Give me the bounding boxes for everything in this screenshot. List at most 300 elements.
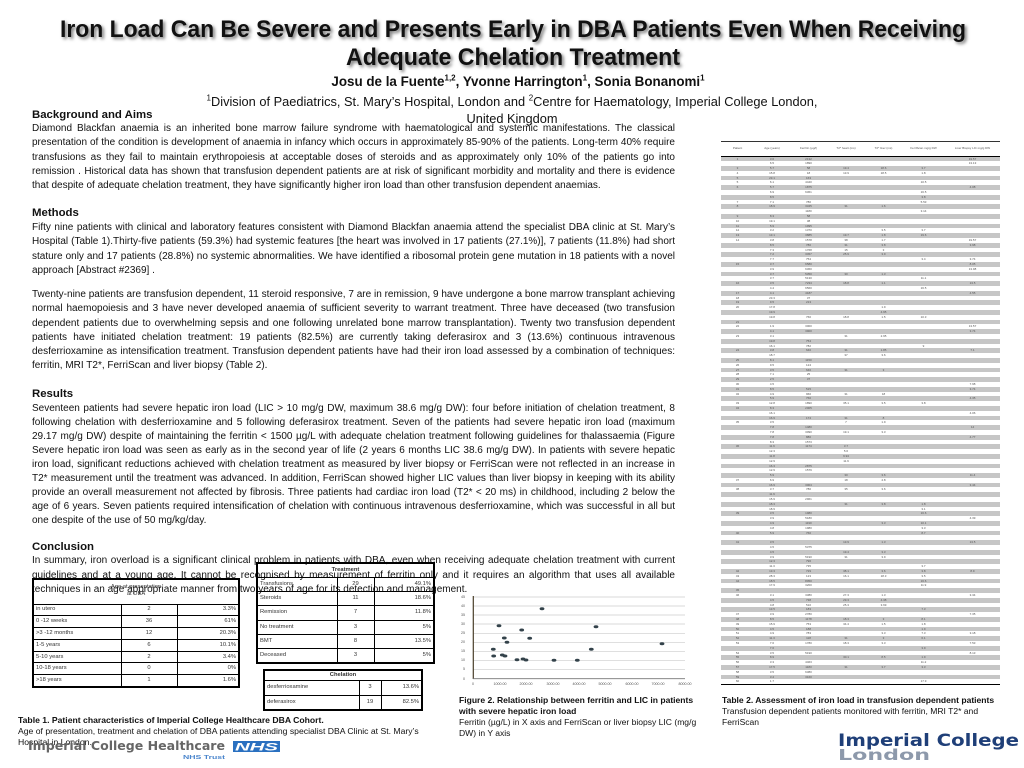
table: assessment of iron load: 7.53 xyxy=(970,641,975,645)
table: treatment: 8 xyxy=(354,638,357,644)
table: assessment of iron load: 640 xyxy=(806,368,811,372)
table: assessment of iron load: 3.98 xyxy=(970,243,975,247)
table: assessment of iron load: 3.8 xyxy=(770,238,774,242)
table: age at presentation: 12 xyxy=(146,630,152,636)
logo: Imperial College London xyxy=(838,731,1019,764)
data points xyxy=(491,607,664,662)
table: chelation: 13.6% xyxy=(403,684,419,690)
table: assessment of iron load: 3.7 xyxy=(770,272,774,276)
table: assessment of iron load: 5.7 xyxy=(770,166,774,170)
table: assessment of iron load: 4 xyxy=(737,171,738,175)
table: age at presentation: 1.6% xyxy=(223,677,236,683)
table: assessment of iron load: 11.1 xyxy=(921,276,926,280)
text: methods paragraph 2: desferrioxamine as intensification treatment. Transfusion dependent patients have had their iron load assessed by a combination of techniques: xyxy=(32,346,675,357)
table: assessment of iron load: 3 xyxy=(883,636,884,640)
table: assessment of iron load: 3.8 xyxy=(881,502,886,506)
table: assessment of iron load: 5.53 xyxy=(921,200,926,204)
table: assessment of iron load: 43 xyxy=(736,574,739,578)
table: assessment of iron load: 51 xyxy=(736,631,739,635)
table: assessment of iron load: 8050 xyxy=(805,579,812,583)
text: methods paragraph 1: approach [Abstract #2369] . xyxy=(32,265,155,276)
table: assessment of iron load: 14 xyxy=(736,238,739,242)
table: assessment of iron load: 3.9 xyxy=(881,252,886,256)
table: assessment of iron load: 753 xyxy=(806,622,811,626)
text: methods paragraph 2: normal haemopoiesis and 3 have never developed anaemia of sufficient severity to warrant treatment. Three have deceased (two transfusion xyxy=(32,303,675,314)
table: assessment of iron load: 3.7 xyxy=(770,262,774,266)
table: assessment of iron load: 3.3 xyxy=(921,526,926,530)
table: assessment of iron load: 1980 xyxy=(805,511,812,515)
table: assessment of iron load: 35.1 xyxy=(843,401,849,405)
table: assessment of iron load: T2* liver (ms) xyxy=(875,146,892,150)
table: assessment of iron load: 1.3 xyxy=(881,593,886,597)
table: assessment of iron load: 13.13 xyxy=(969,161,976,165)
table: assessment of iron load: 11.3 xyxy=(769,564,775,568)
y axis labels: 5 xyxy=(463,667,465,671)
table: assessment of iron load: 19.4 xyxy=(843,166,849,170)
table: treatment: 3 xyxy=(354,652,357,658)
table: assessment of iron load: 3885 xyxy=(805,233,812,237)
table: assessment of iron load: 3.34 xyxy=(970,593,975,597)
table: assessment of iron load: T2* heart (ms) xyxy=(836,146,856,150)
table: assessment of iron load: 1.9 xyxy=(881,420,886,424)
table: assessment of iron load: 19.1 xyxy=(769,219,775,223)
table: assessment of iron load: 23.3 xyxy=(769,296,775,300)
table: assessment of iron load: 39 xyxy=(736,511,739,515)
caption: table 2: FerriScan xyxy=(722,717,759,727)
table: assessment of iron load: 3.3 xyxy=(881,641,886,645)
table: assessment of iron load: 7.8 xyxy=(770,430,774,434)
table: assessment of iron load: 17.8 xyxy=(769,305,775,309)
table: assessment of iron load: 11.8 xyxy=(769,454,775,458)
table: assessment of iron load: 16.5 xyxy=(921,286,926,290)
table: assessment of iron load: 2.95 xyxy=(881,334,886,338)
table: assessment of iron load: 8.3 xyxy=(770,406,774,410)
table: assessment of iron load: 4.38 xyxy=(881,598,886,602)
table: assessment of iron load: 5.9 xyxy=(770,224,774,228)
table: assessment of iron load: 7.2 xyxy=(770,252,774,256)
table: assessment of iron load: 8.1 xyxy=(770,358,774,362)
table: age at presentation: 1-5 years xyxy=(36,642,60,648)
table: assessment of iron load: 3.18 xyxy=(970,631,975,635)
table: assessment of iron load: 3.8 xyxy=(770,348,774,352)
table: assessment of iron load: 31 xyxy=(844,555,848,559)
table: age at presentation: 10-18 years xyxy=(36,665,67,671)
logo: Imperial College Healthcare NHS Trust xyxy=(28,739,280,761)
table: assessment of iron load: 3 xyxy=(737,166,738,170)
table: assessment of iron load: 12.9 xyxy=(769,468,775,472)
table: assessment of iron load: 3.74 xyxy=(970,257,975,261)
caption: table 2 xyxy=(722,695,994,727)
table: assessment of iron load: 4.5 xyxy=(770,382,774,386)
table: treatment: 11.8% xyxy=(415,609,431,615)
table: assessment of iron load: 782 xyxy=(806,344,811,348)
table: assessment of iron load: 1.8 xyxy=(921,171,926,175)
table: age at presentation: Age at presentation xyxy=(111,584,161,590)
table: assessment of iron load: 640 xyxy=(806,348,811,352)
table: assessment of iron load: 1890 xyxy=(805,161,812,165)
table: assessment of iron load: 7.1 xyxy=(770,200,774,204)
x axis labels: 4000.00 xyxy=(572,682,586,686)
table: assessment of iron load: 4.39 xyxy=(970,516,975,520)
y axis labels: 45 xyxy=(461,595,465,599)
table: assessment of iron load: 27 xyxy=(736,368,739,372)
table: assessment of iron load: 3.8 xyxy=(921,401,926,405)
table: treatment: 13.5% xyxy=(415,638,431,644)
table: assessment of iron load: 780 xyxy=(806,487,811,491)
table: assessment of iron load: 3 xyxy=(883,248,884,252)
table: assessment of iron load: 13.98 xyxy=(969,267,976,271)
table: assessment of iron load: 25.3 xyxy=(843,603,849,607)
table: assessment of iron load: 22 xyxy=(736,324,739,328)
table: assessment of iron load: 21 xyxy=(736,320,739,324)
table: assessment of iron load: 13.57 xyxy=(969,324,976,328)
text: results: provide an overall measurement not affected by fibrosis. Three patients had cardiac iron load (T2* < 20 ms) in childhood, including 2 below the xyxy=(32,486,675,498)
table: assessment of iron load: 20 xyxy=(736,305,739,309)
table: assessment of iron load: 13.9 xyxy=(843,171,849,175)
logo: Imperial College Healthcare NHS Trust: NHS xyxy=(235,742,279,754)
table: assessment of iron load: 18.9 xyxy=(769,507,775,511)
table: assessment of iron load: 11.3 xyxy=(769,636,775,640)
table: assessment of iron load: 36 xyxy=(736,444,739,448)
y axis labels: 20 xyxy=(461,640,465,644)
table: assessment of iron load: 29 xyxy=(736,377,739,381)
table: assessment of iron load: 7.3 xyxy=(770,248,774,252)
table: assessment of iron load: 38 xyxy=(736,487,739,491)
table: assessment of iron load: 5.9 xyxy=(770,531,774,535)
table: assessment of iron load: 30.1 xyxy=(843,655,849,659)
logo: Imperial College London: Imperial College xyxy=(838,731,1019,751)
table: assessment of iron load: 27.3 xyxy=(843,593,849,597)
x axis labels: 3000.00 xyxy=(546,682,560,686)
x axis labels: 1000.00 xyxy=(494,682,506,686)
table: assessment of iron load: 3900 xyxy=(805,329,812,333)
table: assessment of iron load: FerriScan mg/g DW xyxy=(910,146,937,150)
y axis labels: 40 xyxy=(461,604,465,608)
table: assessment of iron load: 46 xyxy=(736,593,739,597)
table: assessment of iron load: 1.7 xyxy=(881,238,886,242)
table: assessment of iron load: 124 xyxy=(806,363,811,367)
table: assessment of iron load: 30 xyxy=(844,272,848,276)
table: assessment of iron load: 37 xyxy=(807,296,810,300)
text: background: remission . Historical data has shown that transfusion dependent patients are at risk of significant morbidity and mortality and there is evidence xyxy=(32,166,675,177)
table: age at presentation: 3.3% xyxy=(223,606,236,612)
table: assessment of iron load: 7 xyxy=(845,420,847,424)
table: treatment: 7 xyxy=(354,609,357,615)
table: assessment of iron load: 3.74 xyxy=(970,329,975,333)
table: assessment of iron load: 6.9 xyxy=(770,478,774,482)
table: assessment of iron load: 738 xyxy=(806,598,811,602)
text: methods paragraph 1: stature only and 17 patients (28.8%) no systemic abnormalities. We have identified a ribosomal protein gene mutation in 18 patients with a novel xyxy=(32,250,675,262)
table: assessment of iron load: 3.7 xyxy=(844,444,848,448)
table: age at presentation: 0 -12 weeks xyxy=(36,618,67,624)
table: assessment of iron load: 12.8 xyxy=(769,401,775,405)
section: methods xyxy=(32,207,675,371)
table: assessment of iron load: 8 xyxy=(883,416,884,420)
table: assessment of iron load: 3.7 xyxy=(770,487,774,491)
table: assessment of iron load: 6361 xyxy=(805,190,812,194)
table: assessment of iron load: 3.6 xyxy=(881,487,886,491)
caption: table 1 xyxy=(18,715,419,747)
table: assessment of iron load: 3160 xyxy=(805,675,812,679)
table: assessment of iron load: 10.5 xyxy=(921,180,926,184)
table: assessment of iron load: 16.1 xyxy=(769,411,775,415)
table: assessment of iron load: 174 xyxy=(806,416,811,420)
table: assessment of iron load: 40 xyxy=(736,531,739,535)
table: assessment of iron load: 4.5 xyxy=(770,598,774,602)
table: assessment of iron load: 37 xyxy=(844,353,848,357)
table: assessment of iron load: 5.9 xyxy=(770,396,774,400)
table: assessment of iron load: 5.9 xyxy=(770,473,774,477)
table: assessment of iron load: 1579 xyxy=(805,468,812,472)
text: results xyxy=(32,402,675,526)
table: assessment of iron load: 1.8 xyxy=(881,233,886,237)
table: assessment of iron load: 8.1 xyxy=(921,617,926,621)
table: age at presentation: 0% xyxy=(228,665,236,671)
table: assessment of iron load: 760 xyxy=(806,531,811,535)
table: assessment of iron load: 16 xyxy=(736,281,739,285)
table: assessment of iron load: 1480 xyxy=(805,425,812,429)
table: assessment of iron load: 5190 xyxy=(805,555,812,559)
table: assessment of iron load: 3.5 xyxy=(921,574,926,578)
table: assessment of iron load: 1.9 xyxy=(921,627,926,631)
text: methods paragraph 1 xyxy=(32,222,675,276)
table: assessment of iron load: 3.6 xyxy=(881,569,886,573)
text: conclusion: techniques in an age appropriate manner from two years of age for its detection and management. xyxy=(32,584,467,595)
table: assessment of iron load: 15.9 xyxy=(769,497,775,501)
table: assessment of iron load: 760 xyxy=(806,315,811,319)
table: assessment of iron load: 1.7 xyxy=(770,679,774,683)
table: treatment: 49.1% xyxy=(415,581,431,587)
y axis labels: 10 xyxy=(461,658,465,662)
table: assessment of iron load: 6.9 xyxy=(770,190,774,194)
table: assessment of iron load: 1995 xyxy=(805,224,812,228)
text: results: following chelation with desferrioxamine and 5 following deferasirox treatment. Seven of the patients had severe hepatic iron load (maximum xyxy=(32,416,675,428)
table: assessment of iron load: 10.1 xyxy=(921,521,926,525)
table: assessment of iron load: 32 xyxy=(736,392,739,396)
table: assessment of iron load: 4.5 xyxy=(770,550,774,554)
table: assessment of iron load: 8.5 xyxy=(881,655,886,659)
table: assessment of iron load: 38 xyxy=(807,219,810,223)
text: methods paragraph 1: Fifty nine patients with clinical and laboratory features consistent with Diamond Blackfan anaemia attend the specialist DBA clinic at St. Mary’s xyxy=(32,222,675,233)
table: assessment of iron load: 3 xyxy=(883,368,884,372)
logo: Imperial College London: London xyxy=(838,746,930,764)
table: assessment of iron load: 8.7 xyxy=(921,531,926,535)
table: assessment of iron load: 16.5 xyxy=(921,190,926,194)
table: assessment of iron load: 7.1 xyxy=(770,372,774,376)
table: assessment of iron load: 1174 xyxy=(805,444,812,448)
table: assessment of iron load: 4.5 xyxy=(770,545,774,549)
table: assessment of iron load: 7.35 xyxy=(970,612,975,616)
table: assessment of iron load: 3.8 xyxy=(921,195,926,199)
table: assessment of iron load: 1178 xyxy=(805,617,812,621)
title: Iron Load Can Be Severe and Presents Early in DBA Patients Even When Receiving xyxy=(60,16,966,43)
table: assessment of iron load: 1 xyxy=(737,156,738,160)
table: assessment of iron load: 31 xyxy=(844,368,848,372)
table: assessment of iron load: 10 xyxy=(736,219,739,223)
x axis labels: 6000.00 xyxy=(626,682,638,686)
table: treatment: 3 xyxy=(354,624,357,630)
table: assessment of iron load: 188 xyxy=(806,627,811,631)
table: assessment of iron load: 3.3 xyxy=(881,430,886,434)
table: assessment of iron load: 8.5 xyxy=(770,617,774,621)
table: assessment of iron load: 1.8 xyxy=(921,622,926,626)
table: assessment of iron load: 48 xyxy=(736,617,739,621)
table: assessment of iron load: 38 xyxy=(844,238,848,242)
table: assessment of iron load: 1573 xyxy=(805,440,812,444)
table: assessment of iron load: 3.9 xyxy=(770,612,774,616)
table: age at presentation: 36 xyxy=(146,618,152,624)
table: assessment of iron load: 9 xyxy=(923,344,924,348)
table: assessment of iron load: 18.5 xyxy=(769,579,775,583)
section: conclusion xyxy=(32,541,675,595)
table: age at presentation: >3 -12 months xyxy=(36,630,73,636)
logo: Imperial College Healthcare NHS Trust: NHS Trust xyxy=(183,755,225,761)
table: assessment of iron load: 53 xyxy=(736,641,739,645)
table: assessment of iron load: 4.9 xyxy=(770,392,774,396)
table: age at presentation: at DBA xyxy=(127,591,145,597)
x axis labels xyxy=(472,682,692,686)
table: assessment of iron load: 25 xyxy=(736,358,739,362)
table: chelation: desferrioxamine xyxy=(267,684,308,690)
table: assessment of iron load: 3.7 xyxy=(921,166,926,170)
table: treatment: Deceased xyxy=(260,652,286,658)
table: assessment of iron load: 7.6 xyxy=(770,646,774,650)
table: assessment of iron load: Patient xyxy=(733,146,742,150)
table: assessment of iron load: 3.9 xyxy=(770,555,774,559)
table: assessment of iron load: 1183 xyxy=(805,665,812,669)
text: methods paragraph 1: Hospital (Table 1).Thirty-five patients (59.3%) had systemic features [the heart was involved in 17 patients (27.1%)], 7 patients (11.8%) had short xyxy=(32,236,675,247)
table: assessment of iron load: 3.1 xyxy=(770,593,774,597)
table: assessment of iron load: 18.9 xyxy=(769,204,775,208)
table: assessment of iron load: 3.3 xyxy=(770,660,774,664)
table: assessment of iron load: 18 xyxy=(736,296,739,300)
table: treatment: Steroids xyxy=(260,595,281,601)
text: results: age of 6 years. Seven patients required intensification of chelation with continuous intravenous desferrioxamine, which was successful in all but xyxy=(32,500,675,512)
table: age at presentation: 3.4% xyxy=(223,654,236,660)
table: chelation: 82.5% xyxy=(403,699,419,705)
table: treatment: Transfusions xyxy=(260,581,293,587)
table: assessment of iron load: 4.9 xyxy=(770,631,774,635)
table: assessment of iron load: 3.6 xyxy=(881,353,886,357)
table: assessment of iron load: 13 xyxy=(736,233,739,237)
table: assessment of iron load: 13.5 xyxy=(970,540,975,544)
table: assessment of iron load: 37 xyxy=(807,377,810,381)
table: assessment of iron load: 1.9 xyxy=(881,305,886,309)
table: assessment of iron load: 4440 xyxy=(805,180,812,184)
text: results: one despite of the use of 50 mg/kg/day. xyxy=(32,514,206,526)
table: assessment of iron load: 56 xyxy=(736,660,739,664)
table: chelation: 3 xyxy=(368,684,372,690)
table: assessment of iron load: 8.5 xyxy=(770,387,774,391)
table: assessment of iron load: 7.7 xyxy=(770,257,774,261)
table: assessment of iron load: 5375 xyxy=(805,545,812,549)
table: assessment of iron load: 41 xyxy=(736,540,739,544)
table: assessment of iron load: 1.3 xyxy=(881,540,886,544)
table: assessment of iron load: 9 xyxy=(737,214,738,218)
table: assessment of iron load: 8 xyxy=(737,204,738,208)
y axis labels: 0 xyxy=(463,677,465,681)
text: conclusion: In summary, iron overload is a significant clinical problem in patients with DBA, even when receiving adequate chelation treatment with current xyxy=(32,555,675,566)
table: assessment of iron load: 19 xyxy=(736,300,739,304)
table: assessment of iron load: 1980 xyxy=(805,526,812,530)
text: results: Seventeen patients had severe hepatic iron load (LIC > 10 mg/g DW, maximum 38.6 mg/g DW): four before initiation of chelation treatment, 8 xyxy=(32,402,675,414)
table: assessment of iron load: 4.4 xyxy=(770,286,774,290)
table: treatment xyxy=(256,562,435,664)
table: assessment of iron load: 23 xyxy=(736,334,739,338)
table: assessment of iron load: 18.6 xyxy=(881,166,886,170)
table: assessment of iron load: 1190 xyxy=(805,521,812,525)
table: assessment of iron load: 7.8 xyxy=(770,435,774,439)
table: assessment of iron load: 35 xyxy=(844,487,848,491)
table: assessment of iron load: 16.9 xyxy=(769,483,775,487)
table: assessment of iron load: 123 xyxy=(806,574,811,578)
table: assessment of iron load: 17 xyxy=(736,291,739,295)
table: assessment of iron load: 31 xyxy=(844,334,848,338)
table: assessment of iron load: 7.3 xyxy=(921,607,926,611)
table: assessment of iron load: 12.3 xyxy=(769,449,775,453)
table: assessment of iron load: 19.6 xyxy=(921,233,926,237)
table: assessment of iron load: 3.14 xyxy=(921,209,926,213)
table: assessment of iron load: 11.9 xyxy=(921,583,926,587)
table: assessment of iron load: 13.1 xyxy=(769,233,775,237)
table: assessment of iron load: 4.35 xyxy=(970,396,975,400)
authors: Josu de la Fuente1,2, Yvonne Harrington1, Sonia Bonanomi1 xyxy=(331,74,705,89)
table: assessment of iron load: 18 xyxy=(807,171,810,175)
table: assessment of iron load: 37 xyxy=(736,478,739,482)
table: age at presentation: 2 xyxy=(147,606,151,612)
text: methods paragraph 2: dependent patients due to overwhelming sepsis and one following unrelated bone marrow transplantation). Twenty two transfusion dependent xyxy=(32,318,675,329)
table: assessment of iron load: 18.3 xyxy=(843,641,849,645)
table: age at presentation: 1 xyxy=(147,677,151,683)
text: background: that despite of adequate chelation treatment, they have significantly higher iron load than other transfusion dependent anaemias. xyxy=(32,180,601,191)
table: assessment of iron load: 3.9 xyxy=(770,516,774,520)
text: background: Diamond Blackfan anaemia is an inherited bone marrow failure syndrome with haematological and systemic manifestations. The classical xyxy=(32,123,675,134)
table: assessment of iron load: 3090 xyxy=(805,430,812,434)
table: assessment of iron load: 16.9 xyxy=(769,416,775,420)
table: assessment of iron load xyxy=(721,141,1000,685)
caption: table 1: Table 1. Patient characteristics of Imperial College Healthcare DBA Cohort. xyxy=(18,715,324,725)
table: age at presentation: in utero xyxy=(36,606,55,612)
y axis labels: 35 xyxy=(461,613,465,617)
table: assessment of iron load: 19.8 xyxy=(769,315,775,319)
y axis labels: 15 xyxy=(461,649,465,653)
table: assessment of iron load: 16.6 xyxy=(921,511,926,515)
table: assessment of iron load: 3.5 xyxy=(770,368,774,372)
table: assessment of iron load: 8.9 xyxy=(970,569,975,573)
text: methods paragraph 2: ferritin, MRI T2*, FerriScan and liver biopsy (Table 2). xyxy=(32,360,267,371)
table: assessment of iron load: 8.5 xyxy=(770,243,774,247)
table: assessment of iron load: 7 xyxy=(737,200,738,204)
table: assessment of iron load: 6.1 xyxy=(921,636,926,640)
x axis labels: 8000.00 xyxy=(678,682,692,686)
affiliations: 1Division of Paediatrics, St. Mary’s Hospital, London and 2Centre for Haematology, Imperial College London, United Kingdom xyxy=(207,94,817,126)
table: assessment of iron load: 29.3 xyxy=(843,598,849,602)
table: assessment of iron load: 780 xyxy=(806,243,811,247)
logo: Imperial College Healthcare NHS Trust: Imperial College Healthcare xyxy=(28,739,225,753)
table: assessment of iron load: 3.74 xyxy=(970,387,975,391)
table: assessment of iron load: 1.3 xyxy=(881,272,886,276)
table: assessment of iron load: 515 xyxy=(806,387,811,391)
table: assessment of iron load: 3.3 xyxy=(881,631,886,635)
table: assessment of iron load: 960 xyxy=(806,392,811,396)
table: assessment of iron load: 3.5 xyxy=(770,670,774,674)
table: assessment of iron load: 3 xyxy=(883,617,884,621)
table: assessment of iron load: 31 xyxy=(844,204,848,208)
table: assessment of iron load: 1780 xyxy=(805,641,812,645)
text: results: iron load, significant reductions achieved with chelation treatment as measured by liver biopsy or FerriScan were not reflected in an increase in xyxy=(32,458,675,470)
table: assessment of iron load: 4.8 xyxy=(770,603,774,607)
table: assessment of iron load: 24 xyxy=(736,348,739,352)
